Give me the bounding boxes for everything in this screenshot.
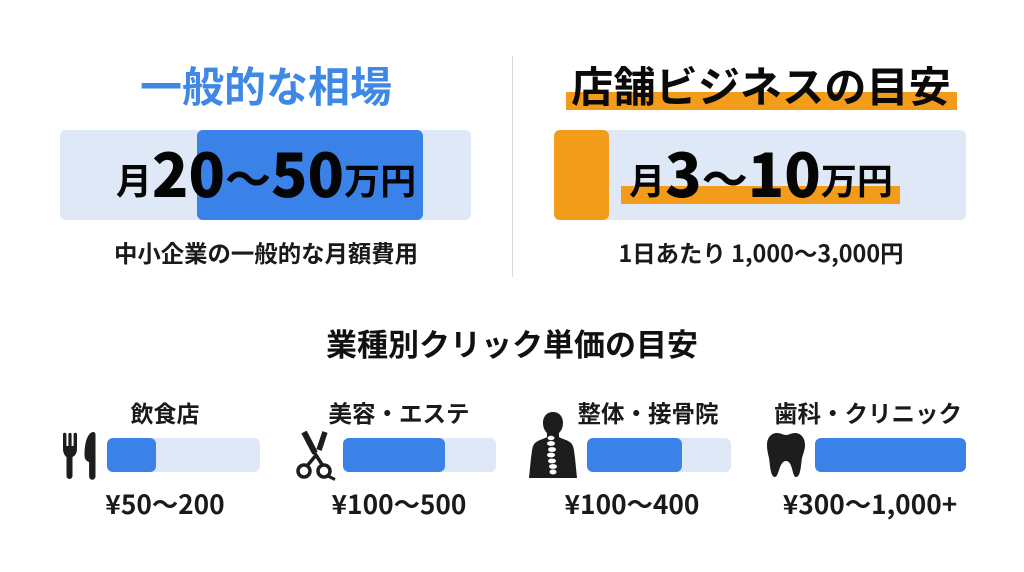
item: dental	[767, 395, 966, 522]
label: beauty: 美容・エステ	[328, 395, 470, 429]
bar fill: beauty	[343, 438, 445, 472]
item: restaurant	[63, 395, 260, 522]
item: chiropractic	[529, 395, 731, 522]
value: beauty: ¥100〜500	[332, 483, 466, 522]
value: monthly 200,000 to 500,000 yen: 月20〜50万円	[116, 128, 416, 215]
value: chiropractic: ¥100〜400	[565, 483, 699, 522]
value: dental: ¥300〜1,000+	[783, 483, 957, 522]
bar: store business range	[554, 130, 966, 220]
heading underline	[566, 92, 957, 110]
icon: tooth	[767, 433, 805, 477]
heading: general rate: 一般的な相場	[140, 54, 392, 115]
label: restaurant: 飲食店	[130, 395, 200, 429]
panel: general market rate	[60, 54, 471, 269]
bar: general rate range	[60, 130, 471, 220]
divider	[512, 56, 513, 277]
item: beauty	[296, 395, 496, 522]
icon: fork and knife	[63, 432, 96, 480]
heading: store business: 店舗ビジネスの目安	[571, 54, 951, 115]
label: dental: 歯科・クリニック	[774, 395, 962, 429]
bar: chiropractic	[587, 438, 731, 472]
caption: per day: 1日あたり 1,000〜3,000円	[618, 235, 904, 269]
bar: restaurant	[107, 438, 260, 472]
bar fill: chiropractic	[587, 438, 682, 472]
bar fill: restaurant	[107, 438, 156, 472]
label: chiropractic: 整体・接骨院	[578, 395, 718, 429]
bar: dental	[815, 438, 966, 472]
heading: click price by industry: 業種別クリック単価の目安	[326, 320, 698, 365]
panel: store business guideline	[554, 54, 966, 269]
value: monthly 30,000 to 100,000 yen: 月3〜10万円	[629, 128, 893, 215]
value underline	[621, 186, 900, 204]
caption: general rate: 中小企業の一般的な月額費用	[114, 235, 418, 269]
icon: scissors	[296, 430, 336, 481]
bar fill: general rate	[197, 130, 423, 220]
bar fill: store business	[554, 130, 609, 220]
value: restaurant: ¥50〜200	[105, 483, 225, 522]
icon: body with spine	[529, 412, 577, 478]
bar: beauty	[343, 438, 496, 472]
